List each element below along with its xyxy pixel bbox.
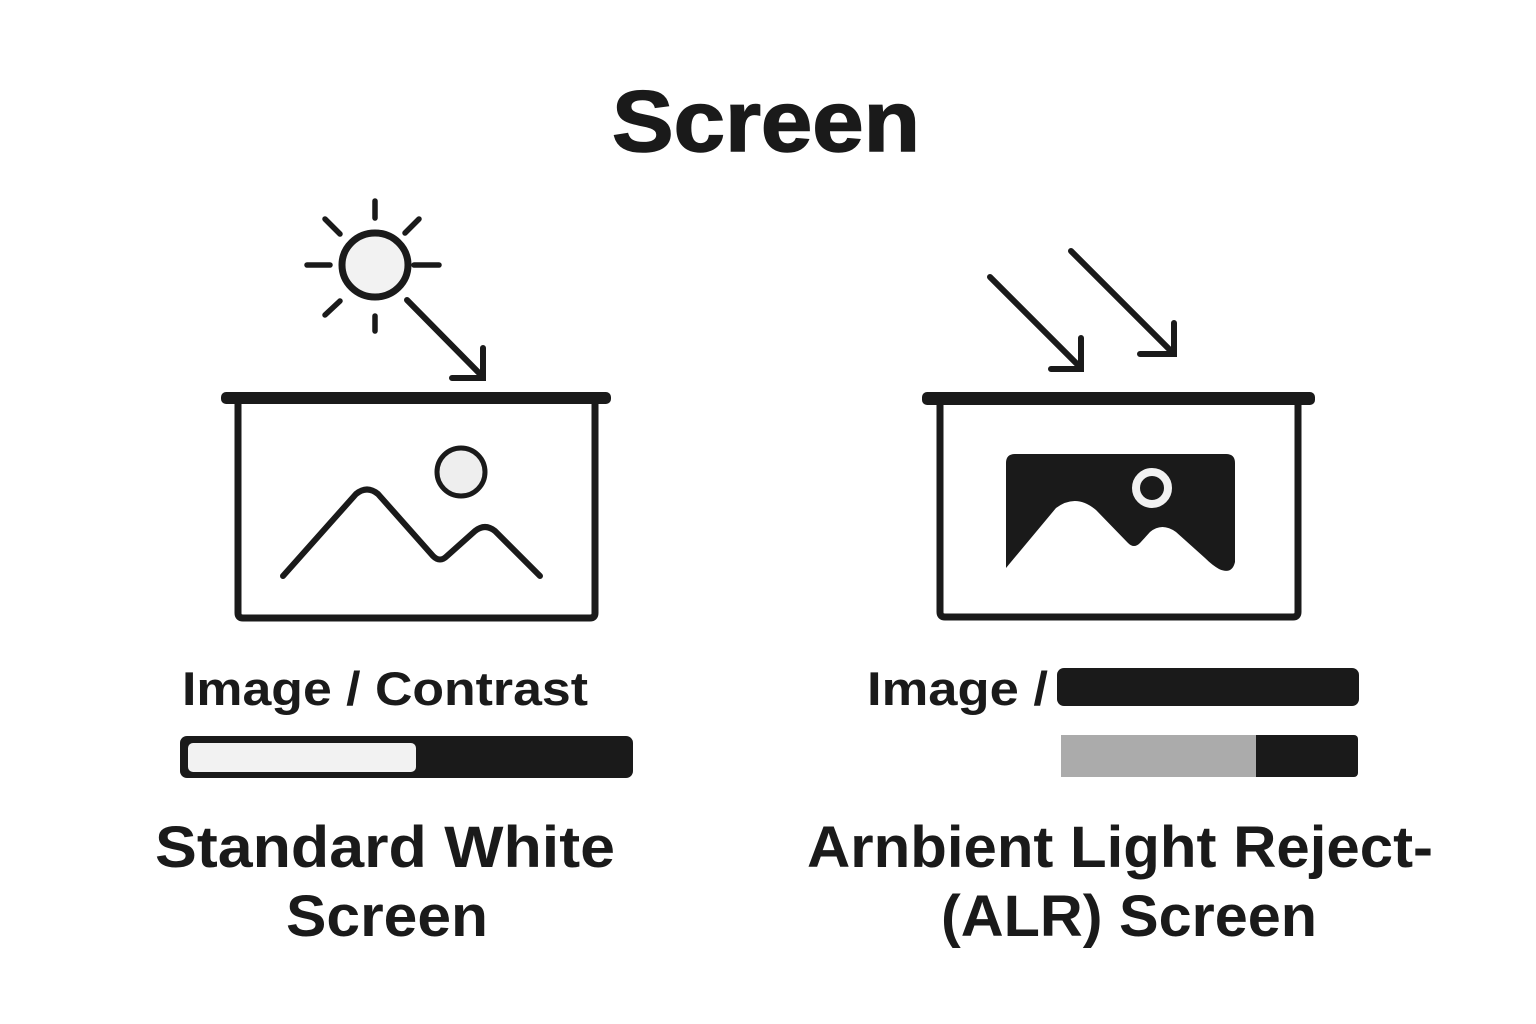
title: Screen <box>612 74 920 170</box>
heading: ALR screen <box>807 815 1433 949</box>
label: image / contrast left: Image / Contrast <box>182 662 588 715</box>
bar: standard contrast <box>180 736 633 778</box>
heading: standard white screen <box>155 815 615 949</box>
icon: ring sun <box>1136 472 1168 504</box>
bar: redacted contrast label <box>1057 668 1359 706</box>
icon: image moon <box>437 448 485 496</box>
label: image left fragment: Image / <box>867 662 1048 715</box>
heading: ALR screen: (ALR) Screen <box>941 884 1317 949</box>
icon: standard screen <box>221 392 611 618</box>
arrows: ambient light <box>990 251 1174 369</box>
icon: dark image <box>1006 454 1235 571</box>
heading: standard white screen: Standard White <box>155 815 615 880</box>
icon: sun <box>307 201 439 331</box>
icon: mountains outline <box>283 490 540 576</box>
bar: ALR contrast <box>1061 735 1358 777</box>
icon: ALR screen <box>922 392 1315 617</box>
heading: ALR screen: Arnbient Light Reject- <box>807 815 1433 880</box>
arrow: sun to standard screen <box>407 300 483 378</box>
heading: standard white screen: Screen <box>286 884 488 949</box>
